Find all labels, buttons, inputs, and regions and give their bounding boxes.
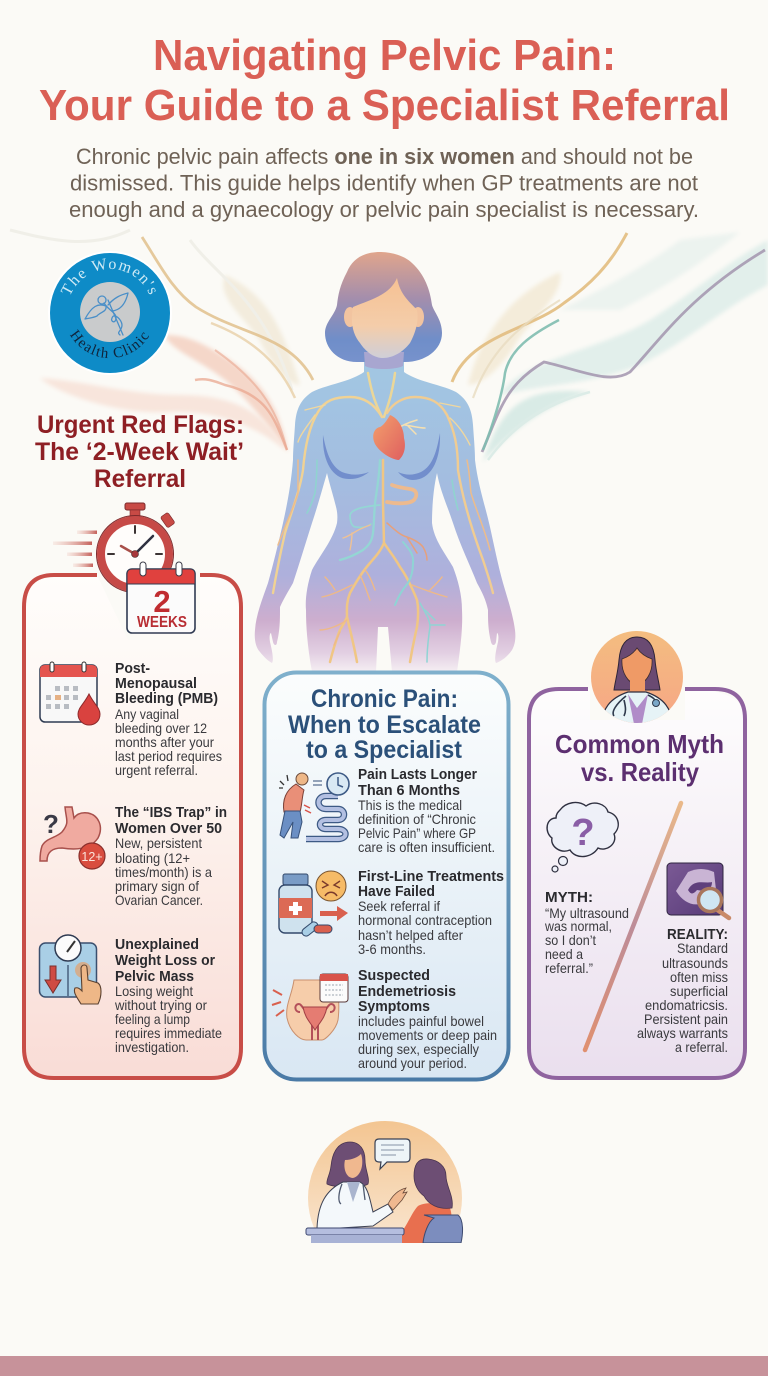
reality text: endomatricsis. [645, 998, 728, 1013]
item: IBS trap: times/month) is a [115, 865, 212, 880]
item: first-line treatments failed: Have Failed [358, 883, 435, 900]
patient [402, 1158, 464, 1243]
face [344, 278, 424, 358]
icon: calendar with blood drop [40, 662, 100, 725]
intro text: Chronic pelvic pain affects one in six women and should not be [76, 144, 693, 169]
item: pain lasts longer: Than 6 Months [358, 782, 460, 799]
heading: urgent red flags [35, 411, 244, 493]
icon: calendar 2 weeks: 2 [153, 584, 171, 619]
heading: urgent red flags: Urgent Red Flags: [37, 411, 244, 439]
icon: ultrasound with magnifier [667, 863, 729, 918]
panel heading: Common Myth [555, 729, 724, 759]
item: weight loss or mass: Pelvic Mass [115, 968, 194, 985]
myth text: need a [545, 947, 583, 962]
panel: chronic pain [264, 672, 508, 1080]
item: IBS trap: bloating (12+ [115, 851, 190, 866]
consultation illustration [306, 1121, 464, 1243]
item: pain lasts longer: Pelvic Pain” where GP [358, 826, 476, 841]
item: first-line treatments failed: First-Line Treatments [358, 868, 504, 885]
reality text: a referral. [675, 1040, 728, 1055]
myth text: so I don’t [545, 933, 596, 948]
icon: scale and hand [40, 935, 101, 1004]
diagonal divider [585, 803, 681, 1050]
icon: thought cloud: ? [571, 812, 595, 854]
item: first-line treatments failed: Seek referral if [358, 899, 440, 914]
breast contours [323, 433, 440, 480]
item: post-menopausal bleeding: last period requires [115, 749, 222, 764]
intro text: enough and a gynaecology or pelvic pain specialist is necessary. [69, 197, 699, 222]
icon: calendar 2 weeks: WEEKS [137, 614, 187, 631]
desk [306, 1228, 404, 1243]
myth text [544, 889, 629, 976]
item: post-menopausal bleeding: Post- [115, 660, 150, 677]
logo: The Women's Health Clinic [48, 251, 172, 375]
myth text: “My ultrasound [545, 906, 629, 921]
logo wordmark: Health Clinic [70, 329, 149, 358]
panel: urgent red flags [24, 503, 241, 1078]
blood vessels [273, 373, 493, 662]
item: post-menopausal bleeding: Bleeding (PMB) [115, 690, 218, 707]
flowing ribbons left [10, 230, 313, 452]
icon: thought cloud [547, 803, 618, 872]
speech bubble [375, 1139, 410, 1169]
item: pain lasts longer: This is the medical [358, 798, 462, 813]
reality text: ultrasounds [662, 956, 728, 971]
neck shadow [364, 352, 404, 369]
item: first-line treatments failed: 3-6 months. [358, 942, 426, 957]
item: suspected endometriosis: movements or deep pain [358, 1028, 497, 1043]
item: first-line treatments failed [279, 868, 504, 957]
panel heading: When to Escalate [288, 711, 481, 739]
item: weight loss or mass: feeling a lump [115, 1012, 190, 1027]
item: suspected endometriosis: Symptoms [358, 998, 430, 1015]
doctor [317, 1142, 407, 1228]
reality text: REALITY: [667, 926, 728, 943]
item: first-line treatments failed: hasn’t helped after [358, 928, 463, 943]
item: suspected endometriosis: Suspected [358, 967, 430, 984]
item: first-line treatments failed: hormonal contraception [358, 913, 492, 928]
heading: urgent red flags: Referral [94, 465, 186, 493]
item: IBS trap [40, 804, 227, 908]
myth text: was normal, [544, 919, 612, 934]
icon: stomach with 12+ [40, 807, 105, 869]
title [39, 31, 730, 130]
item: weight loss or mass: investigation. [115, 1040, 189, 1055]
item: IBS trap: primary sign of [115, 879, 199, 894]
heading: urgent red flags: The ‘2-Week Wait’ [35, 438, 244, 466]
logo wordmark [60, 258, 156, 358]
item: suspected endometriosis [272, 967, 497, 1071]
reality text: superficial [670, 984, 728, 999]
item: post-menopausal bleeding: months after your [115, 735, 214, 750]
item: weight loss or mass: Losing weight [115, 984, 193, 999]
item: weight loss or mass: Weight Loss or [115, 952, 215, 969]
reality text: Standard [677, 941, 728, 956]
icon: person bent with clock [279, 773, 349, 839]
item: pain lasts longer [279, 766, 495, 855]
item: suspected endometriosis: during sex, especially [358, 1042, 479, 1057]
reality text: Persistent pain [644, 1012, 728, 1027]
item: IBS trap: The “IBS Trap” in [115, 804, 227, 821]
item: post-menopausal bleeding [40, 660, 222, 778]
item: weight loss or mass: requires immediate [115, 1026, 222, 1041]
logo wordmark: The Women's [60, 258, 156, 294]
title: Navigating Pelvic Pain: [153, 31, 616, 80]
hair [325, 252, 442, 362]
item: suspected endometriosis: Endemetriosis [358, 983, 456, 1000]
item: IBS trap: Ovarian Cancer. [115, 893, 203, 908]
item: suspected endometriosis: includes painful bowel [358, 1014, 484, 1029]
panel frame [264, 672, 508, 1080]
icon: pelvis with uterus and calendar [272, 974, 348, 1040]
item: weight loss or mass: without trying or [114, 998, 207, 1013]
reality text: always warrants [637, 1026, 728, 1041]
intro text [69, 144, 699, 222]
panel heading: to a Specialist [306, 736, 463, 764]
intro text: dismissed. This guide helps identify when GP treatments are not [70, 170, 698, 196]
item: post-menopausal bleeding: bleeding over 12 [115, 721, 207, 736]
reality text: often miss [670, 970, 728, 985]
item: pain lasts longer: care is often insufficient. [358, 840, 495, 855]
item: suspected endometriosis: around your period. [358, 1056, 467, 1071]
icon: doctor portrait [591, 631, 683, 730]
icon: medicine bottle and frowning face [279, 871, 348, 938]
flowing ribbons right [452, 232, 768, 462]
item: post-menopausal bleeding: Menopausal [115, 675, 197, 692]
panel heading: Chronic Pain: [311, 685, 458, 713]
item: IBS trap: Women Over 50 [115, 820, 222, 837]
panel heading: vs. Reality [581, 757, 699, 787]
footer band [0, 1356, 768, 1376]
panel frame [529, 689, 745, 1078]
body illustration [255, 252, 515, 672]
reality text [637, 926, 728, 1055]
icon: caduceus [85, 293, 128, 335]
body silhouette [255, 350, 515, 672]
icon: calendar 2 weeks [127, 562, 195, 633]
item: pain lasts longer: Pain Lasts Longer [358, 766, 477, 783]
title: Your Guide to a Specialist Referral [39, 81, 730, 130]
item: IBS trap: New, persistent [115, 836, 202, 851]
panel frame [24, 575, 241, 1078]
item: post-menopausal bleeding: urgent referral. [115, 763, 198, 778]
myth text: MYTH: [545, 889, 593, 906]
panel heading [288, 685, 481, 764]
icon: stomach with 12+: 12+ [81, 850, 103, 864]
item: pain lasts longer: definition of “Chronic [358, 812, 476, 827]
icon: stopwatch [53, 503, 175, 592]
panel: myth vs reality [529, 631, 745, 1078]
heart [373, 415, 405, 460]
item: post-menopausal bleeding: Any vaginal [115, 707, 179, 722]
myth text: referral.” [545, 961, 593, 976]
panel heading [555, 729, 724, 787]
item: weight loss or mass: Unexplained [115, 936, 199, 953]
item: weight loss or mass [40, 935, 222, 1055]
icon: stomach with 12+: ? [43, 809, 59, 839]
